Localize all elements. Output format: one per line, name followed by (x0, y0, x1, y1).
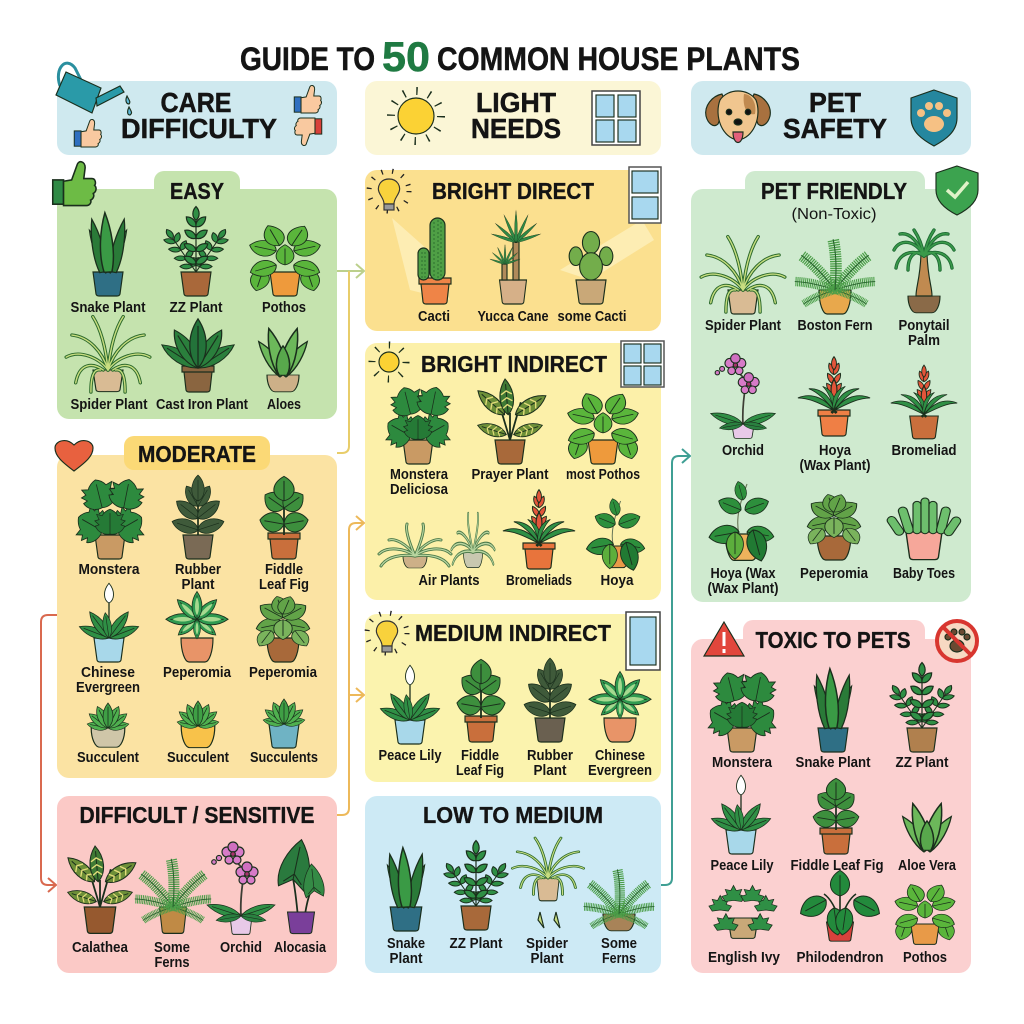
plant: monstera deliciosa: Deliciosa (390, 482, 449, 498)
heading: bright indirect: BRIGHT INDIRECT (421, 351, 607, 377)
plant: some ferns: Some (154, 940, 190, 956)
panel: light needs header (365, 81, 661, 155)
plant: orchid: Orchid (220, 940, 262, 956)
plant: hoya wax plant (798, 357, 871, 474)
plant: snake plant: Plant (390, 951, 423, 967)
plant: fiddle leaf fig (258, 476, 310, 593)
plant: zz plant (436, 841, 516, 952)
plant: most pothos: most Pothos (566, 467, 640, 483)
plant: monstera: Monstera (712, 755, 773, 771)
arrow: low to medium to pet friendly (661, 449, 690, 885)
plant: aloes (254, 327, 312, 413)
title (240, 33, 800, 80)
plant: orchid (709, 354, 777, 459)
plant: snake plant (796, 668, 871, 771)
plant: spider plant (66, 317, 150, 413)
plant: bromeliad: Bromeliad (892, 443, 956, 459)
panel: pet friendly (691, 166, 978, 602)
plant: spider plant: Spider (526, 936, 568, 952)
heading: medium indirect: MEDIUM INDIRECT (415, 620, 611, 646)
icon: paw shield (911, 90, 957, 146)
plant: succulent: Succulent (77, 750, 139, 766)
plant: hoya: Hoya (600, 573, 634, 589)
plant: zz plant: ZZ Plant (896, 755, 949, 771)
plant: succulents: Succulents (250, 750, 318, 766)
heading: toxic to pets: TOXIC TO PETS (756, 627, 910, 653)
plant: succulents (250, 699, 318, 766)
heading: care difficulty: DIFFICULTY (121, 113, 277, 144)
plant: some cacti: some Cacti (558, 309, 626, 325)
plant: yucca cane: Yucca Cane (478, 309, 548, 325)
plant: orchid (206, 842, 276, 956)
plant: fiddle leaf fig (790, 778, 884, 874)
heading: low to medium: LOW TO MEDIUM (423, 802, 603, 828)
plant: snake plant (70, 212, 146, 316)
plant: rubber plant: Plant (182, 577, 215, 593)
plant: chinese evergreen: Evergreen (76, 680, 140, 696)
arrow: moderate to bright direct (337, 271, 349, 453)
plant: peperomia (800, 493, 869, 582)
panel: bright direct (365, 167, 661, 331)
plant: spider plant: Spider Plant (705, 318, 781, 334)
plant: hoya (585, 497, 646, 589)
icon: heart (55, 441, 93, 471)
plant: boston fern: Boston Fern (798, 318, 872, 334)
icon: warning triangle (704, 622, 744, 656)
plant: monstera deliciosa: Monstera (390, 467, 449, 483)
plant: alocasia (274, 837, 327, 956)
plant: zz plant: ZZ Plant (450, 936, 503, 952)
plant: orchid: Orchid (722, 443, 764, 459)
plant: some ferns: Ferns (602, 951, 636, 967)
plant: monstera (70, 475, 150, 578)
plant: aloe vera: Aloe Vera (898, 858, 957, 874)
plant: zz plant: ZZ Plant (170, 300, 223, 316)
heading: light needs: NEEDS (471, 113, 561, 144)
plant: snake plant: Snake Plant (70, 300, 146, 316)
icon: light bulb (369, 171, 409, 211)
panel: low to medium (365, 796, 661, 973)
plant: peace lily: Peace Lily (710, 858, 774, 874)
icon: check shield (936, 166, 978, 215)
icon: window (629, 167, 661, 223)
plant: english ivy (708, 885, 780, 966)
plant: monstera deliciosa (380, 383, 456, 498)
icon: thumbs up and down (74, 85, 322, 147)
plant: pothos: Pothos (262, 300, 306, 316)
heading: difficult / sensitive: DIFFICULT / SENSITIVE (80, 802, 314, 828)
plant: bromeliad (891, 365, 957, 459)
panel: moderate (55, 436, 337, 778)
plant: air plants (379, 514, 495, 589)
icon: sun (372, 345, 406, 379)
heading: pet friendly: PET FRIENDLY (761, 178, 907, 204)
plant: fiddle leaf fig: Leaf Fig (259, 577, 309, 593)
heading: pet safety: SAFETY (783, 113, 887, 144)
plant: some ferns: Ferns (154, 955, 190, 971)
plant: ponytail palm (894, 230, 954, 349)
plant: fiddle leaf fig: Fiddle Leaf Fig (790, 858, 884, 874)
plant: calathea: Calathea (72, 940, 129, 956)
panel: easy (53, 162, 337, 419)
plant: chinese evergreen: Chinese (595, 748, 645, 764)
plant: bromeliads (503, 490, 575, 589)
plant: hoya wax: (Wax Plant) (708, 581, 779, 597)
plant: hoya wax plant: Hoya (819, 443, 852, 459)
panel: difficult / sensitive (57, 796, 337, 973)
icon: sun (391, 91, 441, 141)
heading: care difficulty (121, 87, 277, 144)
plant: pothos: Pothos (903, 950, 947, 966)
plant: fiddle leaf fig (455, 659, 507, 779)
plant: bromeliads: Bromeliads (506, 573, 572, 589)
plant: peperomia (163, 591, 232, 681)
panel: bright indirect (365, 341, 664, 600)
plant: hoya wax: Hoya (Wax (710, 566, 776, 582)
plant: peperomia: Peperomia (163, 665, 232, 681)
arrow: easy to bright direct (337, 264, 364, 278)
plant: zz plant (156, 207, 236, 316)
plant: prayer plant: Prayer Plant (472, 467, 549, 483)
plant: aloe vera (898, 802, 957, 874)
plant: spider plant (512, 838, 584, 967)
plant: some cacti (558, 232, 626, 325)
plant: fiddle leaf fig: Fiddle (265, 562, 303, 578)
plant: rubber plant (522, 658, 578, 779)
plant: some ferns (584, 869, 654, 967)
plant: baby toes (886, 498, 962, 582)
plant: succulent: Succulent (167, 750, 229, 766)
title: COMMON HOUSE PLANTS (437, 41, 800, 77)
plant: snake plant (383, 847, 429, 967)
plant: cast iron plant: Cast Iron Plant (156, 397, 248, 413)
icon: window (621, 341, 664, 387)
plant: chinese evergreen: Chinese (81, 665, 135, 681)
plant: peace lily (709, 775, 774, 874)
icon: window (626, 612, 660, 670)
arrow: difficult to medium and bright indirect (337, 516, 364, 815)
plant: cast iron plant (156, 319, 248, 413)
plant: zz plant (882, 663, 962, 771)
plant: rubber plant: Rubber (527, 748, 573, 764)
panel: toxic to pets (691, 620, 977, 973)
arrow: moderate to difficult (41, 615, 57, 892)
plant: peperomia (249, 595, 318, 681)
heading: easy: EASY (170, 178, 224, 204)
plant: spider plant: Plant (530, 951, 564, 967)
light beams (392, 218, 450, 300)
plant: some ferns (135, 859, 211, 971)
icon: dog (706, 91, 770, 142)
heading: light needs: LIGHT (476, 87, 556, 118)
plant: air plants: Air Plants (418, 573, 480, 589)
plant: spider plant: Spider Plant (70, 397, 148, 413)
heading: pet friendly (761, 178, 907, 223)
plant: calathea (63, 845, 139, 956)
plant: alocasia: Alocasia (274, 940, 327, 956)
plant: hoya wax (707, 480, 779, 597)
plant: chinese evergreen (76, 583, 141, 696)
heading: pet friendly: (Non-Toxic) (792, 206, 876, 223)
plant: fiddle leaf fig: Leaf Fig (456, 763, 504, 779)
plant: succulent (167, 701, 229, 766)
plant: pothos (893, 882, 957, 966)
plant: philodendron: Philodendron (796, 950, 884, 966)
plant: fiddle leaf fig: Fiddle (461, 748, 499, 764)
icon: watering can (56, 63, 132, 115)
plant: rubber plant: Rubber (175, 562, 221, 578)
icon: no pets sign (937, 621, 977, 661)
plant: chinese evergreen: Evergreen (588, 763, 652, 779)
title: GUIDE TO (240, 41, 375, 77)
heading: moderate: MODERATE (138, 441, 256, 467)
plant: cacti: Cacti (418, 309, 450, 325)
plant: philodendron (796, 870, 884, 966)
plant: chinese evergreen (588, 671, 652, 779)
plant: english ivy: English Ivy (708, 950, 780, 966)
plant: spider plant (701, 237, 785, 334)
plant: baby toes: Baby Toes (893, 566, 955, 582)
plant: monstera (702, 668, 782, 771)
plant: aloes: Aloes (267, 397, 301, 413)
plant: peace lily (378, 665, 442, 764)
plant: succulent (77, 703, 139, 766)
panel: pet safety header (691, 81, 971, 155)
plant: pothos (247, 222, 323, 316)
plant: yucca cane (478, 211, 548, 325)
heading: pet safety: PET (809, 87, 861, 118)
plant: peperomia: Peperomia (800, 566, 869, 582)
plant: some ferns: Some (601, 936, 637, 952)
plant: monstera: Monstera (78, 562, 140, 578)
heading: light needs (471, 87, 561, 144)
plant: snake plant: Snake (387, 936, 425, 952)
plant: boston fern (795, 239, 875, 334)
plant: peace lily: Peace Lily (378, 748, 442, 764)
heading: bright direct: BRIGHT DIRECT (432, 178, 594, 204)
heading: care difficulty: CARE (160, 87, 232, 118)
heading: pet safety (783, 87, 887, 144)
panel: medium indirect (365, 612, 661, 782)
icon: light bulb (367, 613, 407, 653)
title: 50 (382, 33, 430, 80)
plant: snake plant: Snake Plant (796, 755, 871, 771)
plant: ponytail palm: Palm (908, 333, 940, 349)
panel: care difficulty header (56, 63, 337, 155)
icon: green thumb up (53, 162, 96, 206)
plant: peperomia: Peperomia (249, 665, 318, 681)
plant: hoya wax plant: (Wax Plant) (800, 458, 871, 474)
plant: most pothos (565, 390, 641, 483)
plant: rubber plant (170, 475, 226, 593)
icon: window (592, 91, 640, 145)
plant: rubber plant: Plant (534, 763, 567, 779)
plant: cacti (418, 218, 451, 325)
plant: prayer plant (472, 378, 549, 483)
plant: ponytail palm: Ponytail (898, 318, 950, 334)
